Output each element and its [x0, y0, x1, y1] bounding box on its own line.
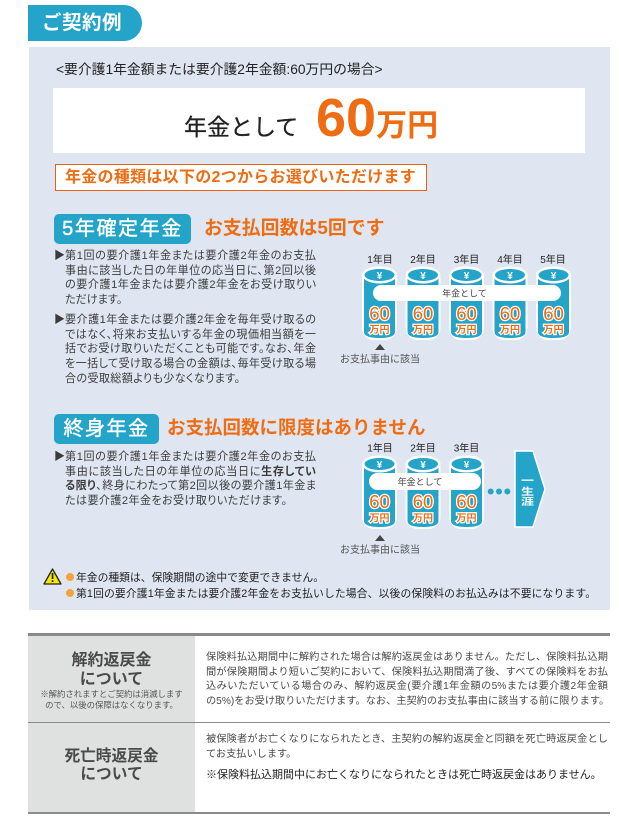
badge: 5年確定年金	[54, 214, 191, 244]
text block: 5-year pension: ただけます。	[65, 294, 122, 306]
cylinders, year 1 to 5: お支払事由に該当	[340, 352, 420, 366]
cylinders, year 1 to 5: 3年目	[454, 253, 479, 266]
row footnote	[40, 688, 183, 710]
text block: 5-year pension: ▶	[54, 250, 65, 262]
cylinders, year 1 to 5: 60	[456, 303, 477, 324]
orange outlined note: 年金の種類は以下の2つからお選びいただけます	[65, 169, 416, 186]
chart: lifetime payments: 一	[521, 476, 535, 487]
death refund text: ※保険料払込期間中にお亡くなりになられたときは死亡時返戻金はありません。	[206, 769, 602, 781]
cylinders, year 1 to 5: ¥	[551, 271, 557, 282]
notes bullets	[66, 573, 74, 597]
chart: lifetime payments: 2年目	[410, 442, 436, 454]
surrender refund text: 込みいただいている場合のみ、解約返戻金(要介護1年金額の5%または要介護2年金額	[206, 681, 608, 692]
row title: について	[80, 671, 143, 688]
death refund text: 被保険者がお亡くなりになられたとき、主契約の解約返戻金と同額を死亡時返戻金とし	[206, 734, 608, 745]
text block: lifetime pension: 事由に該当した日の年単位の応当日に生存してい	[65, 466, 316, 478]
chart: lifetime payments: 60	[413, 491, 433, 512]
cylinders, year 1 to 5: 1年目	[367, 253, 393, 266]
row header: 死亡時返戻金	[28, 723, 195, 814]
badge: 終身年金	[54, 414, 159, 444]
cylinders, year 1 to 5: 万円	[500, 324, 520, 336]
cylinders, year 1 to 5: ¥	[377, 271, 383, 282]
chart: lifetime payments: 万円	[413, 512, 433, 524]
row footnote: ので、以後の保障はなくなります。	[45, 700, 178, 710]
cylinders, year 1 to 5: ¥	[420, 271, 426, 282]
cylinders, year 1 to 5: ¥	[507, 271, 513, 282]
row footnote: ※解約されますとご契約は消滅します	[40, 688, 183, 698]
death refund text: てお支払いします。	[206, 749, 296, 760]
chart: lifetime payments	[340, 442, 545, 556]
chart: lifetime payments: 万円	[456, 512, 476, 524]
cylinders, year 1 to 5: 万円	[370, 324, 390, 336]
condition text: <要介護1年金額または要介護2年金額:60万円の場合>	[56, 62, 383, 77]
cylinders, year 1 to 5: 年金として	[442, 288, 487, 298]
chart: lifetime payments: 60	[456, 491, 477, 512]
cylinders, year 1 to 5: 60	[369, 303, 390, 324]
section tab: ご契約例	[28, 5, 142, 41]
row title	[64, 747, 159, 783]
notes: 年金の種類は、保険期間の途中で変更できません。	[76, 572, 324, 584]
chart: lifetime payments: 年金として	[398, 476, 442, 487]
cylinders, year 1 to 5: ¥	[464, 271, 470, 282]
cylinders, year 1 to 5	[340, 253, 571, 366]
cylinders, year 1 to 5: 60	[413, 303, 433, 324]
text block: 5-year pension: 第1回の要介護1年金または要介護2年金のお支払	[65, 250, 316, 262]
chart: lifetime payments: ¥	[420, 460, 426, 471]
cylinders, year 1 to 5: 万円	[456, 324, 476, 336]
heading: no payment limit: お支払回数に限度はありません	[167, 417, 425, 438]
row header: 解約返戻金	[28, 633, 195, 723]
chart: lifetime payments: ¥	[377, 460, 383, 471]
row title: 解約返戻金	[71, 652, 152, 668]
cylinders, year 1 to 5: 万円	[544, 324, 564, 336]
cylinders, year 1 to 5: 60	[500, 303, 520, 324]
text block: 5-year pension: を一括して受け取る場合の金額は、毎年受け取る場	[65, 358, 316, 370]
text block: 5-year pension: 合の受取総額よりも少なくなります。	[65, 373, 240, 385]
text block: 5-year pension: ▶	[54, 314, 65, 326]
surrender refund text: 間が保険期間より短いご契約において、保険料払込期間満了後、すべての保険料をお払	[206, 667, 608, 678]
notes: 第1回の要介護1年金または要介護2年金をお支払いした場合、以後の保険料のお払込みは不要になります。	[76, 588, 596, 600]
icon: warning triangle	[44, 569, 61, 584]
text block: lifetime pension: ▶	[54, 451, 65, 463]
text block: lifetime pension: 第1回の要介護1年金または要介護2年金のお支払	[65, 451, 316, 463]
death refund text	[206, 733, 608, 781]
section tab: ご契約例: ご契約例	[42, 12, 122, 34]
text block: lifetime pension: たは要介護2年金をお受け取りいただけます。	[65, 495, 287, 507]
text block: 5-year pension: 括でお受け取りいただくことも可能です。なお、年金	[65, 343, 316, 355]
cylinders, year 1 to 5: 60	[543, 303, 564, 324]
text block: 5-year pension: の要介護1年金または要介護2年金をお受け取りい	[65, 279, 316, 291]
surrender refund text: 保険料払込期間中に解約された場合は解約返戻金はありません。ただし、保険料払込期	[206, 652, 608, 663]
cylinders, year 1 to 5: 5年目	[540, 253, 566, 266]
amount value: 60万円	[316, 88, 438, 148]
cylinders, year 1 to 5: 万円	[413, 324, 433, 336]
row title	[71, 651, 152, 688]
badge: 5年確定年金: 5年確定年金	[62, 218, 183, 240]
chart: lifetime payments: 万円	[370, 512, 390, 524]
surrender refund text: の5%)をお受け取りいただけます。なお、主契約のお支払事由に該当する前に限ります。	[206, 696, 609, 707]
heading: payment count five: お支払回数は5回です	[204, 218, 385, 239]
table: surrender and death refunds	[28, 633, 610, 814]
text block: lifetime pension	[54, 450, 316, 507]
chart: lifetime payments: 1年目	[367, 442, 393, 454]
chart: lifetime payments: 生	[521, 486, 534, 498]
badge: 終身年金: 終身年金	[64, 418, 150, 440]
chart: lifetime payments: 60	[369, 491, 390, 512]
text block: 5-year pension: 事由に該当した日の年単位の応当日に、第2回以後	[65, 265, 316, 277]
chart: lifetime payments: ¥	[464, 460, 470, 471]
text block: 5-year pension	[54, 249, 316, 385]
chart: lifetime payments: 涯	[521, 496, 535, 508]
text block: 5-year pension: 要介護1年金または要介護2年金を毎年受け取るの	[65, 314, 316, 326]
row title: について	[80, 766, 143, 783]
panel: contract example	[29, 47, 610, 610]
text block: 5-year pension: ではなく、将来お支払いする年金の現価相当額を一	[65, 329, 316, 341]
row title: 死亡時返戻金	[64, 748, 159, 764]
row dividers	[195, 633, 610, 814]
chart: lifetime payments: 3年目	[454, 442, 479, 454]
white box: pension amount	[53, 88, 585, 153]
orange outlined note	[55, 164, 427, 191]
text block: lifetime pension: る限り、終身にわたって第2回以後の要介護1年金ま	[65, 480, 316, 492]
cylinders, year 1 to 5: 2年目	[410, 253, 436, 266]
cylinders, year 1 to 5: 4年目	[497, 253, 523, 266]
amount label: 年金として	[184, 114, 298, 140]
surrender refund text	[206, 651, 609, 707]
chart: lifetime payments: お支払事由に該当	[340, 543, 420, 556]
notes	[76, 572, 596, 600]
